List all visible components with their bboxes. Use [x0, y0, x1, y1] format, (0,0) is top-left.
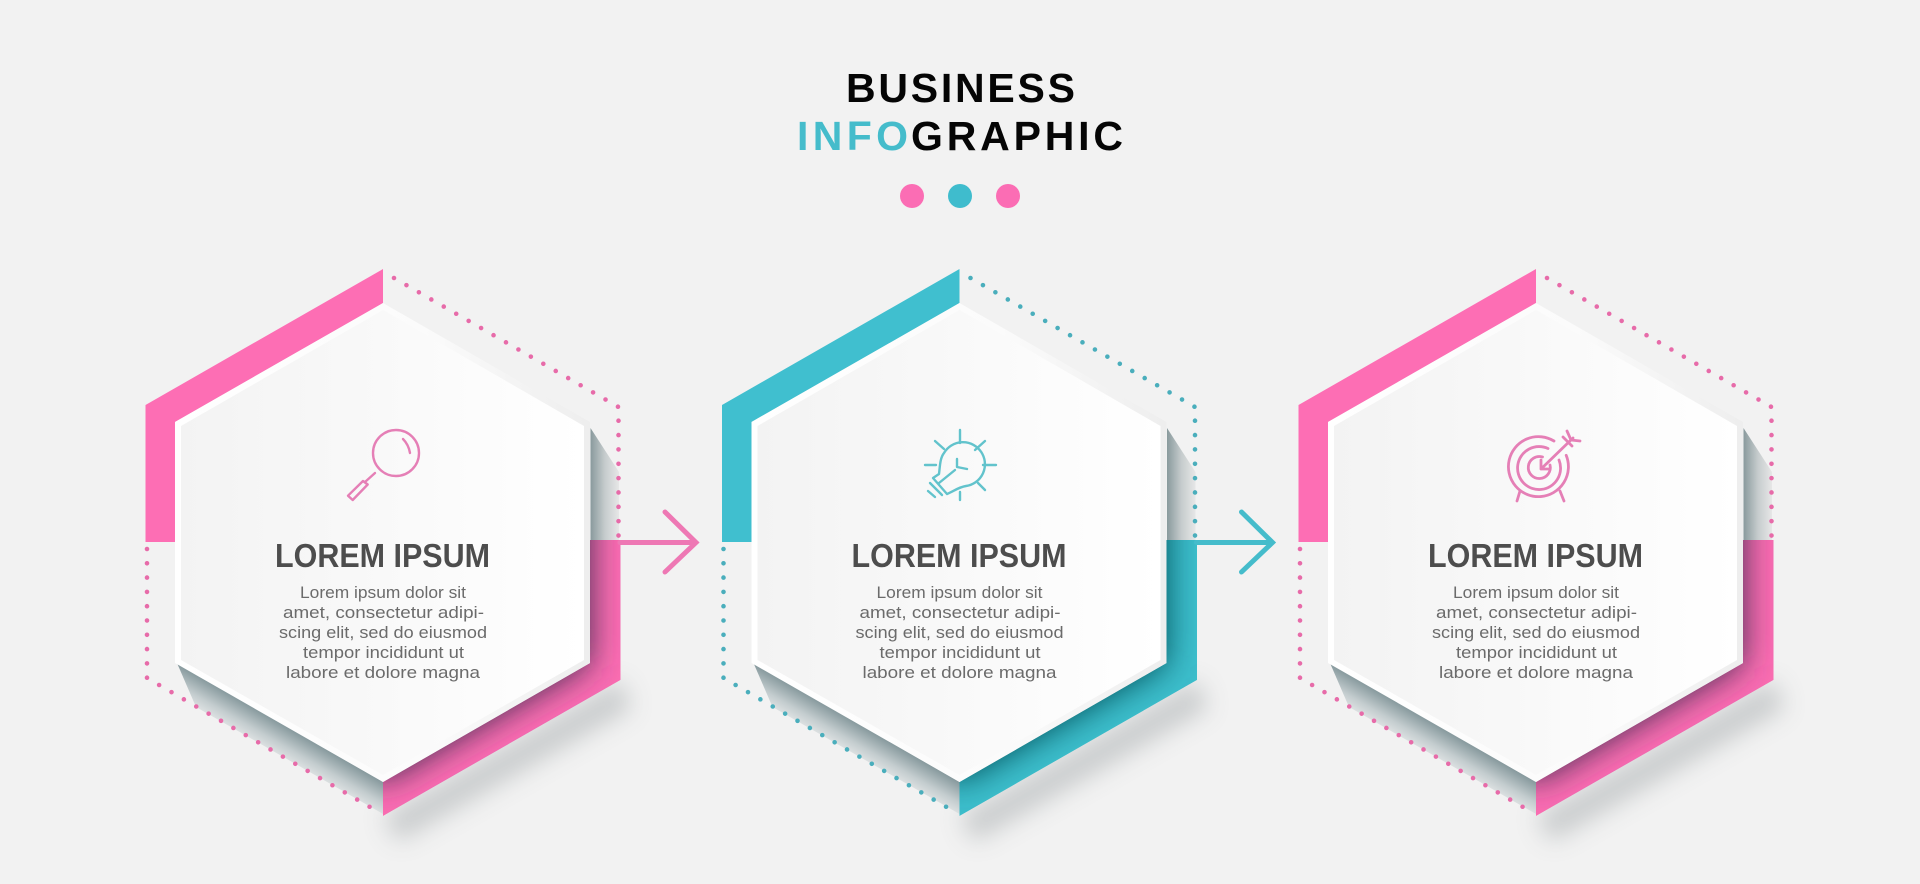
icon: magnifier [348, 430, 419, 500]
lower left shadow [1330, 663, 1536, 814]
body text: labore et dolore magna [286, 663, 481, 682]
upper band [1298, 269, 1536, 542]
dotted outline bottom left [724, 549, 946, 807]
hexagon card [1328, 303, 1743, 782]
title: BUSINESS [846, 65, 1075, 111]
body text: Lorem ipsum dolor sit [300, 583, 466, 602]
arrow [620, 512, 696, 572]
soft drop shadow [383, 680, 632, 842]
right edge shadow [1167, 428, 1196, 540]
arrow [1196, 512, 1272, 572]
hexagon card [175, 303, 590, 782]
dotted outline bottom left [147, 549, 370, 807]
soft drop shadow [960, 680, 1208, 842]
dotted outline top right [970, 278, 1195, 536]
dotted outline bottom left [1300, 549, 1523, 807]
right edge shadow [590, 428, 619, 540]
icon: light bulb with clock [925, 430, 996, 500]
body text: amet, consectetur adipi- [860, 603, 1060, 622]
heading: LOREM IPSUM [852, 537, 1066, 574]
body text: amet, consectetur adipi- [283, 603, 484, 622]
right edge shadow [1744, 428, 1772, 540]
dotted outline top right [394, 278, 618, 536]
body text: tempor incididunt ut [1456, 643, 1617, 662]
body text [856, 583, 1064, 682]
lower band [1536, 540, 1774, 816]
body text: tempor incididunt ut [303, 643, 464, 662]
body text [1432, 583, 1640, 682]
body text: labore et dolore magna [1439, 663, 1634, 682]
body text: scing elit, sed do eiusmod [1432, 623, 1640, 642]
body text: labore et dolore magna [862, 663, 1057, 682]
icon: target with arrow [1508, 431, 1580, 501]
body text: scing elit, sed do eiusmod [279, 623, 487, 642]
lower band [383, 540, 620, 816]
upper band [722, 269, 960, 542]
panel: step 3 [1298, 269, 1785, 842]
heading: LOREM IPSUM [1428, 537, 1643, 574]
title: GRAPHIC [911, 113, 1123, 159]
body text: amet, consectetur adipi- [1436, 603, 1637, 622]
soft drop shadow [1536, 680, 1785, 842]
panel: step 2 [722, 269, 1272, 842]
body text: tempor incididunt ut [880, 643, 1041, 662]
body text: Lorem ipsum dolor sit [1453, 583, 1619, 602]
heading: LOREM IPSUM [275, 537, 490, 574]
lower band [960, 540, 1197, 816]
hexagon card [752, 303, 1166, 782]
title [797, 65, 1123, 159]
panel: step 1 [146, 269, 696, 842]
upper band [146, 269, 383, 542]
body text [279, 583, 487, 682]
body text: Lorem ipsum dolor sit [876, 583, 1043, 602]
lower left shadow [754, 663, 960, 814]
title: INFO [797, 113, 908, 159]
dotted outline top right [1547, 278, 1772, 536]
title dots [900, 184, 1020, 208]
lower left shadow [177, 663, 383, 814]
body text: scing elit, sed do eiusmod [856, 623, 1064, 642]
